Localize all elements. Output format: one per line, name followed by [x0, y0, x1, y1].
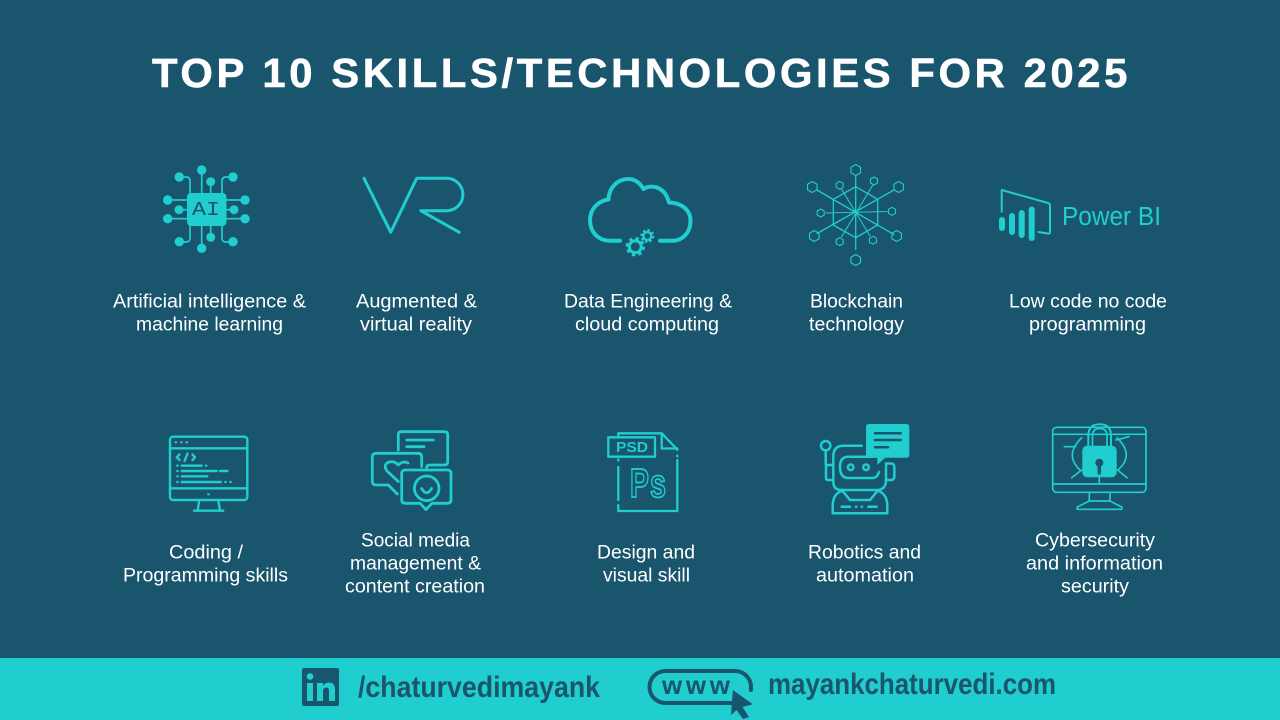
- skill: robotics: [808, 424, 921, 586]
- icon: robot with speech bubble: [821, 424, 909, 513]
- skill: blockchain: [808, 164, 905, 336]
- label: Artificial intelligence &: [113, 292, 306, 312]
- icon: blockchain network: [808, 164, 904, 266]
- label: cloud computing: [575, 314, 719, 336]
- label: Low code no code: [1009, 292, 1167, 312]
- label: Design and: [597, 542, 695, 564]
- skill: augmented and virtual reality: [356, 178, 477, 336]
- icon: PSD file: [608, 433, 677, 511]
- label: security: [1061, 576, 1130, 598]
- label: Cybersecurity: [1035, 530, 1156, 552]
- label: [809, 292, 905, 336]
- icon: PSD file: s: [650, 462, 666, 506]
- label: [123, 542, 288, 586]
- label: content creation: [345, 576, 485, 598]
- icon: code monitor: [170, 437, 247, 511]
- label: management &: [350, 554, 481, 574]
- icon: chat bubbles: [372, 432, 451, 510]
- skill: data engineering and cloud computing: [564, 179, 732, 336]
- label: [1009, 292, 1167, 336]
- LinkedIn handle: /chaturvedimayank: [358, 671, 600, 704]
- icon: cloud with gears: [590, 179, 690, 255]
- website address: mayankchaturvedi.com: [768, 668, 1056, 701]
- label: [113, 292, 306, 336]
- label: automation: [816, 566, 914, 586]
- skill: cybersecurity: [1026, 424, 1163, 598]
- skill: design and visual: [597, 433, 695, 586]
- skill: low code no code: [999, 190, 1167, 336]
- label: Coding /: [169, 542, 244, 564]
- label: Robotics and: [808, 542, 921, 564]
- icon: VR: [364, 178, 463, 232]
- label: [808, 542, 921, 586]
- label: [356, 292, 477, 336]
- icon: LinkedIn: [302, 668, 339, 706]
- icon: Power BI logo: Power BI: [1062, 203, 1161, 231]
- label: visual skill: [603, 566, 690, 586]
- label: technology: [809, 314, 905, 336]
- icon: www cursor: www: [661, 670, 731, 700]
- label: Blockchain: [810, 292, 903, 312]
- skill: artificial intelligence: [113, 165, 306, 336]
- icon: www cursor: [650, 670, 753, 719]
- icon: PSD file: PSD: [616, 439, 648, 456]
- label: and information: [1026, 554, 1163, 574]
- skill: social media: [345, 432, 485, 598]
- label: [1026, 530, 1163, 598]
- icon: AI chip: AI: [192, 199, 220, 221]
- label: programming: [1029, 314, 1146, 336]
- skill: coding: [123, 437, 288, 586]
- label: [564, 292, 732, 336]
- icon: PSD file: P: [630, 460, 649, 506]
- label: Social media: [361, 530, 470, 552]
- icon: Power BI logo: [999, 190, 1161, 241]
- label: Augmented &: [356, 292, 477, 312]
- icon: padlock on monitor: [1053, 424, 1146, 509]
- label: virtual reality: [360, 314, 473, 336]
- icon: AI chip: [163, 165, 250, 253]
- label: [345, 530, 485, 598]
- label: [597, 542, 695, 586]
- footer band: [0, 658, 1280, 720]
- label: Data Engineering &: [564, 292, 732, 312]
- title: TOP 10 SKILLS/TECHNOLOGIES FOR 2025: [152, 50, 1131, 96]
- label: Programming skills: [123, 566, 288, 586]
- label: machine learning: [136, 314, 283, 336]
